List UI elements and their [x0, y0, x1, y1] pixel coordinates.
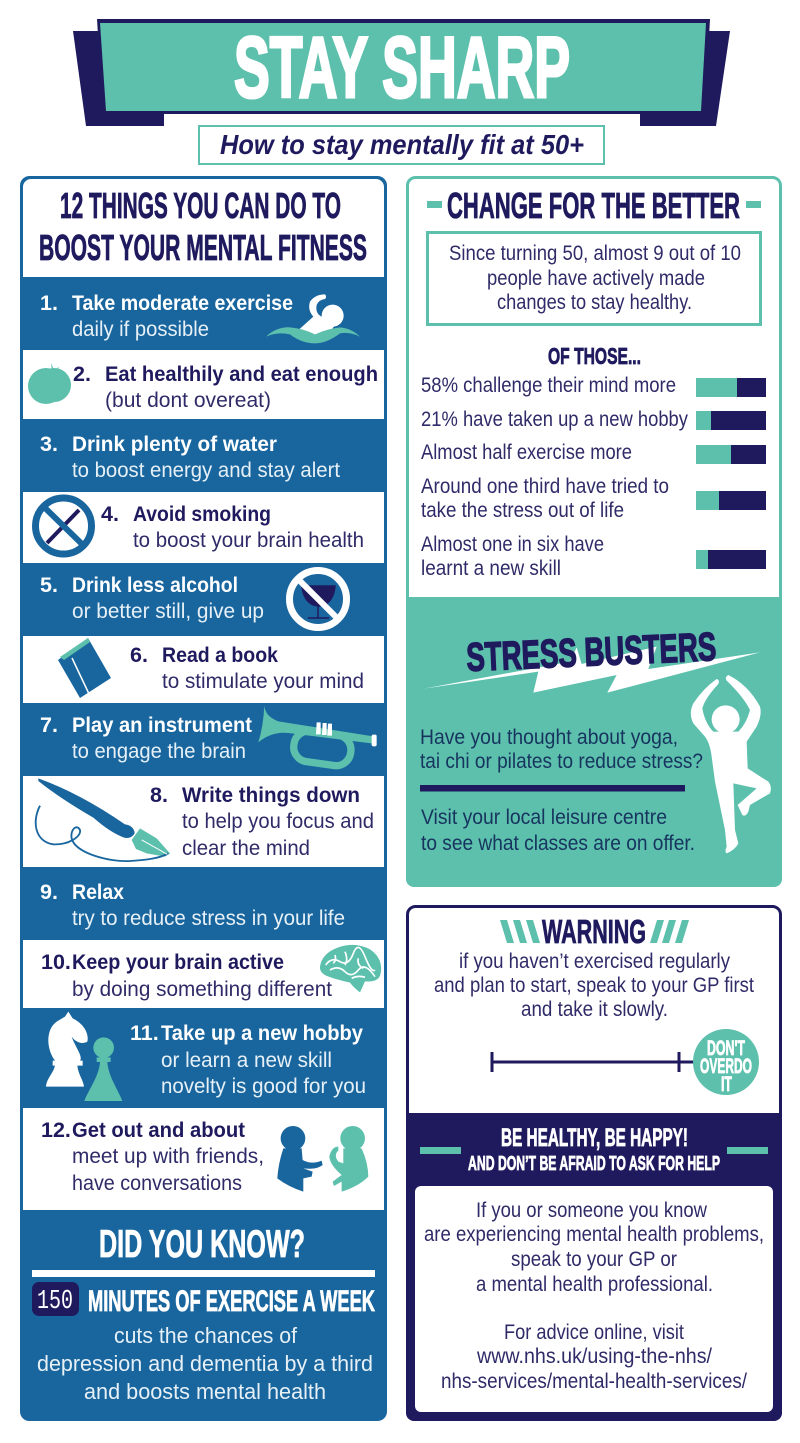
icon: book [58, 638, 111, 698]
item 6: Read a book [162, 643, 278, 667]
item 6 [23, 636, 384, 703]
badge: don't overdo it: OVERDO [700, 1055, 752, 1078]
help text box: nhs-services/mental-health-services/ [441, 1370, 747, 1393]
stat: one in six: learnt a new skill [421, 557, 561, 580]
item 3: to boost energy and stay alert [72, 459, 340, 482]
item 1 [40, 291, 360, 343]
item 8 [23, 776, 384, 867]
stat: 21%: 21% have taken up a new hobby [421, 408, 688, 431]
panel: change for the better [406, 178, 782, 887]
help text box: For advice online, visit [504, 1321, 684, 1344]
icon: trumpet [258, 706, 377, 768]
item 2: 2. [73, 362, 91, 386]
stress text: tai chi or pilates to reduce stress? [420, 750, 703, 773]
icon: fountain pen [36, 778, 170, 861]
title banner [73, 19, 730, 126]
stress text [420, 726, 703, 855]
warning text: if you haven’t exercised regularly [459, 950, 730, 973]
subtitle: How to stay mentally fit at 50+ [220, 129, 584, 160]
item 12: Get out and about [72, 1118, 245, 1142]
item 11 [46, 1012, 366, 1101]
item 4: 4. [101, 502, 119, 526]
title: STAY SHARP [234, 20, 570, 116]
item 3: Drink plenty of water [72, 432, 278, 456]
item 5: or better still, give up [72, 600, 264, 623]
help text box: www.nhs.uk/using-the-nhs/ [476, 1345, 712, 1368]
stress text: to see what classes are on offer. [421, 832, 695, 855]
stress text: Visit your local leisure centre [421, 806, 667, 829]
help text box: If you or someone you know [476, 1199, 708, 1222]
item 10 [23, 940, 384, 1008]
icon: yoga figure [691, 675, 771, 853]
item 5: Drink less alcohol [72, 573, 238, 597]
item 9: try to reduce stress in your life [72, 907, 345, 930]
did you know: depression and dementia by a third [37, 1351, 373, 1376]
item 1: Take moderate exercise [72, 291, 293, 315]
panel: stress busters [406, 597, 782, 887]
did you know: MINUTES OF EXERCISE A WEEK [88, 1285, 375, 1318]
item 1: 1. [40, 291, 58, 315]
item 1: daily if possible [72, 318, 209, 341]
item 12: have conversations [72, 1172, 242, 1195]
item 9: Relax [72, 880, 124, 904]
item 7 [40, 706, 377, 768]
stat: 58%: 58% challenge their mind more [421, 374, 676, 397]
scale line [492, 1052, 696, 1072]
heading: 12 things: BOOST YOUR MENTAL FITNESS [39, 227, 367, 268]
stat: one in six [421, 533, 766, 580]
icon: no alcohol [290, 570, 346, 628]
panel: warning [406, 906, 782, 1421]
item 3 [40, 432, 340, 482]
item 11: Take up a new hobby [161, 1021, 363, 1045]
stat: almost half: Almost half exercise more [421, 441, 632, 464]
heading: 12 things [39, 185, 367, 268]
item 2: (but dont overeat) [105, 389, 271, 412]
badge: don't overdo it: DON'T [707, 1037, 745, 1060]
item 12: meet up with friends, [72, 1145, 264, 1168]
icon: brain [320, 945, 381, 992]
panel: be healthy [406, 1113, 782, 1421]
heading: 12 things: 12 THINGS YOU CAN DO TO [60, 185, 341, 226]
item 2: Eat healthily and eat enough [105, 362, 378, 386]
help text box: speak to your GP or [511, 1248, 677, 1271]
item 8: 8. [150, 783, 168, 807]
icon: no smoking [36, 498, 92, 554]
warning text: and take it slowly. [521, 998, 668, 1021]
heading: be healthy [468, 1124, 720, 1175]
callout: since turning 50 [428, 232, 760, 324]
item 5 [40, 570, 346, 628]
item 6: to stimulate your mind [162, 670, 364, 693]
item 3: 3. [40, 432, 58, 456]
icon: swimmer [266, 294, 360, 343]
item 7: 7. [40, 713, 58, 737]
stat: one third [421, 475, 766, 522]
item 12 [23, 1108, 384, 1210]
item 8: clear the mind [182, 837, 310, 860]
item 6: 6. [130, 643, 148, 667]
stat: one third: Around one third have tried to [421, 475, 669, 498]
item 4: Avoid smoking [133, 502, 271, 526]
item 11: or learn a new skill [161, 1049, 332, 1072]
item 8: Write things down [182, 783, 360, 807]
stat: one third: take the stress out of life [421, 499, 624, 522]
stress text: Have you thought about yoga, [420, 726, 678, 749]
heading: warning: WARNING [542, 913, 646, 950]
callout: since turning 50: Since turning 50, almost 9 out of 10 [449, 242, 741, 265]
help text box [415, 1186, 773, 1412]
150 badge [32, 1282, 79, 1317]
icon: apple [28, 363, 71, 404]
stat: one in six: Almost one in six have [421, 533, 604, 556]
did you know [32, 1223, 375, 1404]
item 4: to boost your brain health [133, 529, 364, 552]
badge: don't overdo it [693, 1029, 759, 1096]
callout: since turning 50: changes to stay healthy. [497, 291, 692, 314]
item 9 [40, 880, 345, 930]
badge: don't overdo it: IT [721, 1073, 732, 1096]
did you know: cuts the chances of [114, 1323, 298, 1348]
item 11: 11. [130, 1021, 159, 1045]
help text box: a mental health professional. [476, 1273, 713, 1296]
callout: since turning 50: people have actively made [487, 267, 705, 290]
heading: be healthy: BE HEALTHY, BE HAPPY! [501, 1124, 688, 1152]
item 11: novelty is good for you [161, 1075, 366, 1098]
item 9: 9. [40, 880, 58, 904]
did you know: DID YOU KNOW? [99, 1223, 305, 1266]
icon: lightning bolt [424, 647, 760, 693]
panel: 12 things [22, 178, 386, 1420]
warning text: and plan to start, speak to your GP first [434, 974, 754, 997]
item 5: 5. [40, 573, 58, 597]
item 10: by doing something different [72, 978, 332, 1001]
item 10: Keep your brain active [72, 950, 284, 974]
150 badge: 150 [37, 1287, 73, 1317]
warning text [434, 950, 754, 1021]
icon: two people [277, 1126, 368, 1192]
item 7: to engage the brain [72, 740, 246, 763]
did you know: and boosts mental health [84, 1379, 326, 1404]
item 10: 10. [41, 950, 71, 974]
item 7: Play an instrument [72, 713, 252, 737]
icon: chess pieces [46, 1012, 122, 1101]
item 2 [23, 350, 384, 419]
item 4 [23, 492, 384, 563]
item 12: 12. [41, 1118, 71, 1142]
subheading: of those: OF THOSE... [548, 343, 641, 369]
item 8: to help you focus and [182, 810, 374, 833]
help text box: are experiencing mental health problems, [424, 1223, 764, 1246]
